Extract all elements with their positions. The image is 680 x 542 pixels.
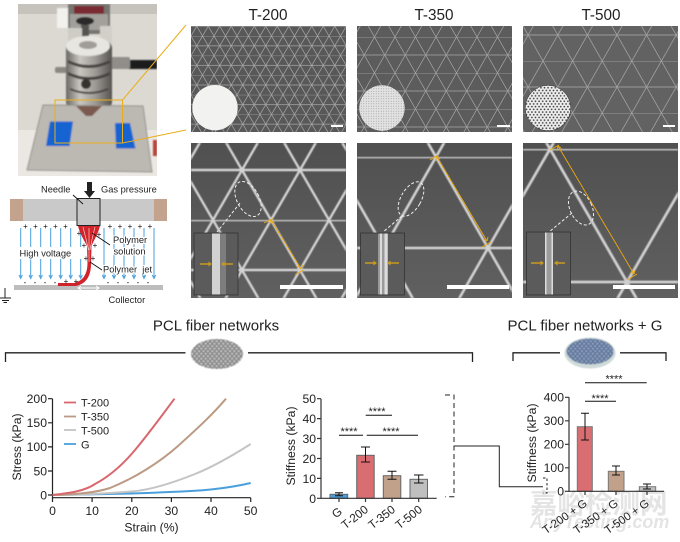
- charges: +: [53, 222, 58, 231]
- charges: -: [147, 278, 150, 287]
- x tick labels: T-200 + G: [541, 498, 590, 537]
- column titles: T-500: [581, 7, 621, 24]
- legend: [64, 398, 109, 452]
- y tick labels: 200: [27, 392, 47, 406]
- y tick labels: 150: [27, 416, 47, 430]
- bars: [330, 455, 428, 498]
- dashed callout: [217, 177, 267, 232]
- charges: +: [43, 222, 48, 231]
- y axis title: Stiffness (kPa): [525, 403, 539, 483]
- scale bar: [663, 125, 675, 127]
- inset: fiber width: [526, 232, 570, 295]
- x tick labels: T-350 + G: [572, 498, 621, 537]
- needle box: [77, 198, 100, 226]
- y tick labels: 100: [544, 461, 564, 475]
- stage motion arrow: [78, 286, 99, 290]
- charges: -: [34, 278, 37, 287]
- panel: T-500 high magnification: [523, 143, 678, 298]
- scale bar: [331, 125, 343, 127]
- charges: +: [91, 254, 96, 263]
- inset: fiber width: [194, 233, 238, 295]
- y tick labels: 100: [27, 440, 47, 454]
- panel: T-500 low magnification: [523, 26, 678, 132]
- x tick labels: T-200: [338, 502, 371, 532]
- heading: PCL fiber networks + G: PCL fiber networks + G: [508, 318, 662, 334]
- charges: +: [84, 254, 89, 263]
- panel: T-350 high magnification: [357, 143, 512, 298]
- icon: gas pressure arrow: [84, 182, 95, 198]
- photo: printing apparatus: [18, 4, 157, 176]
- y tick labels: 0: [557, 484, 564, 498]
- charges: -: [127, 278, 130, 287]
- icon: fiber network disc: [191, 339, 243, 369]
- charges: [23, 222, 153, 287]
- y tick labels: [302, 392, 316, 506]
- significance markers: ****: [591, 393, 609, 405]
- y tick labels: 400: [544, 390, 564, 404]
- schematic labels: Collector: [108, 295, 145, 305]
- schematic labels: [20, 184, 157, 305]
- dashed callout: [549, 187, 599, 232]
- y tick labels: 0: [309, 492, 316, 506]
- schematic labels: solution: [114, 246, 146, 256]
- collector bar: [14, 285, 163, 290]
- panel: T-200 high magnification: [191, 143, 346, 298]
- x tick labels: 20: [125, 504, 139, 518]
- error bars: [581, 413, 651, 489]
- significance markers: [585, 374, 647, 405]
- significance markers: [339, 406, 418, 438]
- charges: +: [64, 277, 69, 286]
- bracket: PCL fiber networks: [6, 353, 472, 362]
- x tick labels: [49, 504, 258, 518]
- inset: fiber width: [360, 233, 404, 295]
- y tick labels: 40: [302, 412, 316, 426]
- charges: +: [128, 222, 133, 231]
- scale bar: [280, 285, 343, 289]
- panel: T-200 low magnification: [191, 26, 346, 132]
- y tick labels: 50: [302, 392, 316, 406]
- bar chart: stiffness of fiber networks with gel: [525, 374, 664, 537]
- curve: T-350: [52, 399, 226, 495]
- x tick labels: 10: [85, 504, 99, 518]
- orange dimension arrow: [264, 218, 303, 275]
- y axis title: Stiffness (kPa): [284, 406, 298, 486]
- charges: -: [54, 278, 57, 287]
- curve: T-200: [52, 399, 174, 495]
- axes: [317, 399, 437, 502]
- legend: G: [81, 440, 90, 452]
- y tick labels: 200: [544, 438, 564, 452]
- bracket: PCL fiber networks + G: [513, 353, 666, 361]
- schematic labels: High voltage: [20, 248, 71, 258]
- x tick labels: G: [329, 504, 345, 521]
- y tick labels: [27, 392, 47, 502]
- charges: +: [77, 229, 82, 238]
- x tick labels: 40: [204, 504, 218, 518]
- charges: +: [63, 222, 68, 231]
- charges: +: [82, 241, 87, 250]
- significance markers: ****: [340, 426, 358, 438]
- dashed callout: [383, 178, 429, 232]
- y axis title: Stress (kPa): [10, 413, 24, 481]
- photo disc T-500: [525, 85, 571, 131]
- scale bar: [447, 285, 509, 289]
- axes: [48, 399, 251, 502]
- bars: [577, 427, 656, 491]
- line chart: stress vs strain: [10, 392, 258, 534]
- schematic: near-field electrospinning: [0, 182, 167, 305]
- curve: T-500: [52, 444, 251, 495]
- schematic labels: Needle: [41, 184, 70, 194]
- charges: +: [33, 222, 38, 231]
- column titles: [248, 7, 621, 24]
- curve: G: [52, 483, 251, 495]
- column titles: T-350: [414, 7, 454, 24]
- leader lines: [73, 195, 110, 270]
- schematic labels: Gas pressure: [101, 184, 157, 194]
- legend: T-500: [81, 426, 109, 438]
- charges: +: [23, 222, 28, 231]
- y tick labels: [544, 390, 564, 498]
- x tick labels: T-350: [365, 502, 398, 532]
- significance markers: ****: [605, 374, 623, 386]
- photo disc T-350: [359, 85, 405, 131]
- x tick labels: T-500: [392, 502, 425, 532]
- bar chart: stiffness of fiber networks: [284, 392, 437, 532]
- x tick labels: 50: [244, 504, 258, 518]
- dashed bracket and connector: [445, 395, 547, 497]
- significance markers: ****: [382, 426, 400, 438]
- scale bar: [497, 125, 510, 127]
- charges: +: [148, 222, 153, 231]
- orange dimension arrow: [550, 145, 637, 280]
- significance markers: ****: [368, 406, 386, 418]
- x tick labels: [541, 498, 652, 537]
- charges: -: [117, 278, 120, 287]
- y tick labels: 300: [544, 414, 564, 428]
- scale bar: [613, 285, 675, 289]
- y tick labels: 50: [33, 464, 47, 478]
- gantry plate: [10, 199, 167, 221]
- charges: -: [24, 278, 27, 287]
- watermark: AnyTesting.com: [529, 512, 669, 532]
- icon: fiber network with gel disc: [564, 338, 616, 368]
- charges: -: [107, 278, 110, 287]
- charges: +: [93, 241, 98, 250]
- x tick labels: T-500 + G: [603, 498, 652, 537]
- charges: +: [108, 222, 113, 231]
- x tick labels: 30: [165, 504, 178, 518]
- watermark: 嘉峪检测网: [530, 488, 668, 519]
- icon: ground: [0, 288, 11, 302]
- charges: +: [74, 277, 79, 286]
- zoom box and leader lines: [55, 25, 186, 143]
- charges: +: [138, 222, 143, 231]
- charges: +: [118, 222, 123, 231]
- x axis title: Strain (%): [124, 520, 179, 534]
- axes: [565, 397, 664, 495]
- orange dimension arrow: [430, 155, 491, 247]
- legend: T-350: [81, 412, 109, 424]
- schematic labels: Polymer: [113, 235, 147, 245]
- y tick labels: 20: [302, 452, 316, 466]
- charges: -: [137, 278, 140, 287]
- y tick labels: 30: [302, 432, 316, 446]
- charges: +: [97, 230, 102, 239]
- column titles: T-200: [248, 7, 288, 24]
- charges: -: [44, 278, 47, 287]
- x tick labels: 0: [49, 504, 56, 518]
- error bars: [335, 447, 424, 496]
- y tick labels: 10: [302, 472, 316, 486]
- heading: PCL fiber networks: PCL fiber networks: [153, 318, 279, 334]
- polymer jet: [58, 226, 100, 286]
- panel: T-350 low magnification: [357, 26, 512, 132]
- electric field arrows: [19, 228, 156, 278]
- x tick labels: [329, 502, 425, 532]
- watermark: [529, 488, 669, 532]
- schematic labels: Polymer jet: [103, 264, 152, 274]
- legend: T-200: [81, 398, 109, 410]
- y tick labels: 0: [40, 488, 47, 502]
- photo disc T-200: [192, 85, 238, 130]
